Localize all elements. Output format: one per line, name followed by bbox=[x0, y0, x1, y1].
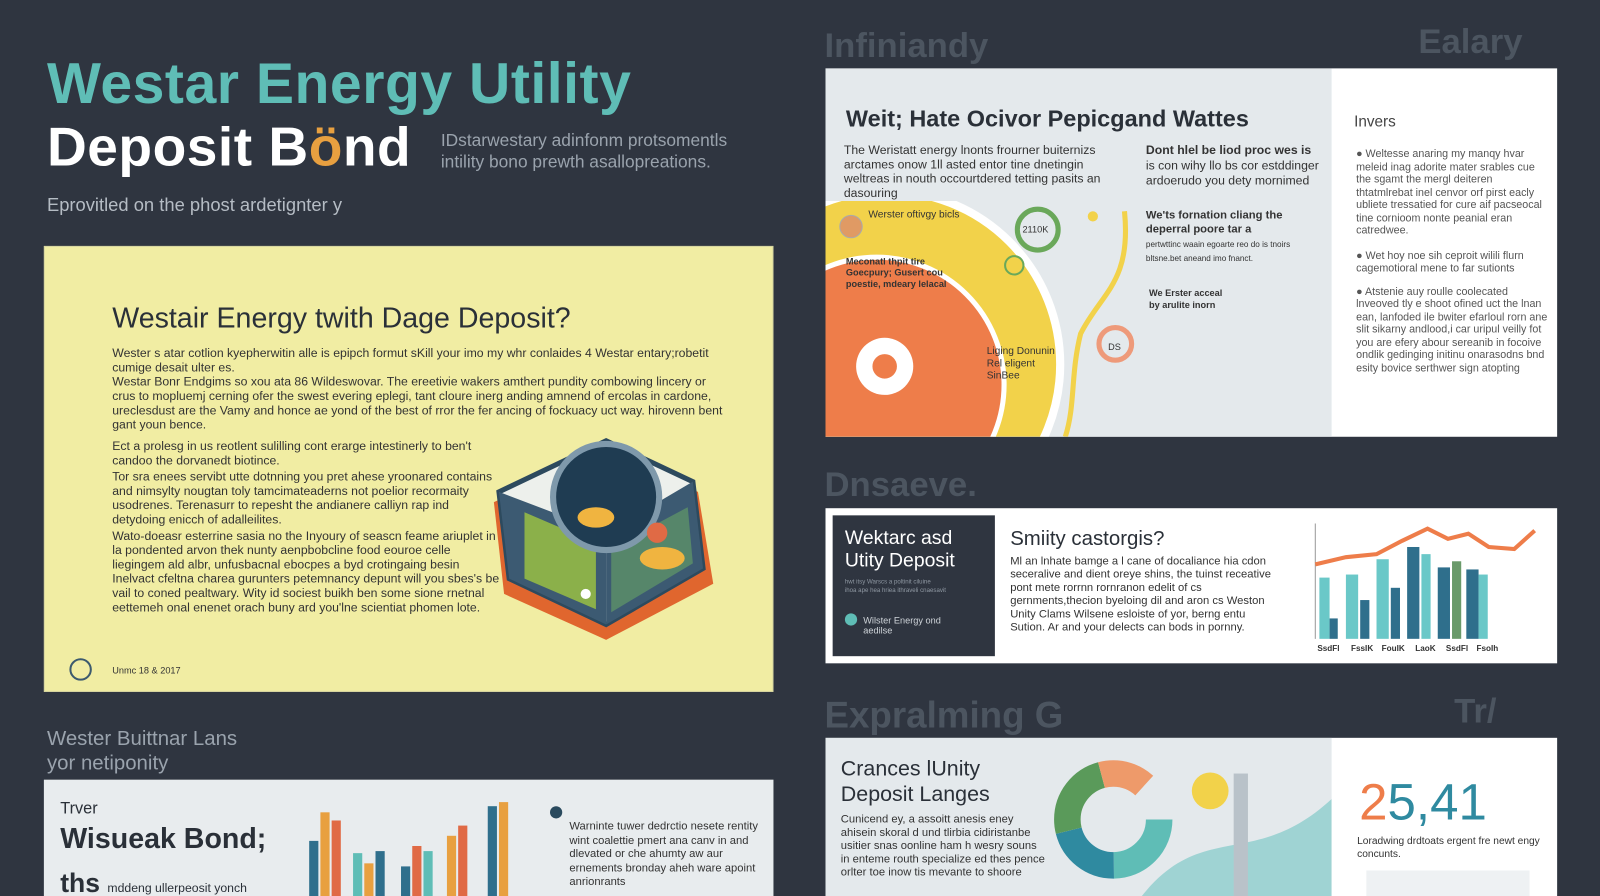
icon: hexagon illustration bbox=[494, 438, 714, 640]
bar chart: SsdFl bbox=[1317, 644, 1340, 653]
panel: right top: Meconatl thpit tire Goecpury; Gusert cou poestie, mdeary lelacal bbox=[846, 256, 946, 289]
bar chart: FouIK bbox=[1382, 644, 1405, 653]
panel: right top: Werster oftivgy bicls bbox=[868, 209, 959, 220]
heading: bottom left: Wester Buittnar Lans bbox=[47, 728, 237, 750]
dark box: Wilster Energy ond bbox=[863, 615, 941, 626]
panel: right bottom: Loradwing drdtoats ergent fre newt engy concunts. bbox=[1357, 836, 1540, 860]
panel: right top bbox=[826, 68, 1557, 437]
panel: right top: pertwttinc waain egoarte reo do is tnoirs bltsne.bet aneand imo fnanct. bbox=[1146, 240, 1290, 263]
panel: right top: ● Atstenie auy roulle coolecated lnveoved tly e shoot ofined uct the lnan ean, lanfoded ile bwiter efarloul rorn ane slit sikarny andlood,i car uripul veilly fot you are efery abour sereanib in focoive ondlik gedinging initinu onarasodns bnd esity bovice serthwer sign atopting bbox=[1356, 285, 1547, 374]
text block: Wester s atar cotlion kyepherwitin alle is epipch formut sKill your imo my whr conlaides 4 Westar entary;robetit cumige desait ulter es. bbox=[112, 346, 709, 375]
heading: Weit; Hate Ocivor Pepicgand Wattes bbox=[846, 105, 1249, 132]
panel: bottom left: Trver bbox=[60, 800, 98, 817]
icon: footer badge bbox=[69, 658, 92, 681]
panel: right top: 2110K bbox=[1022, 225, 1048, 235]
title: Deposit Bönd bbox=[47, 116, 411, 178]
dark box: Wektarc asd bbox=[845, 528, 952, 549]
faded headings: Infiniandy bbox=[824, 27, 988, 65]
bar chart: FssIK bbox=[1351, 644, 1373, 653]
bar chart: FsoIh bbox=[1477, 644, 1498, 653]
panel: right top: DS bbox=[1108, 342, 1121, 352]
title: Westar Energy Utility bbox=[47, 51, 631, 115]
panel: right top: The Weristatt energy lnonts frourner buiternizs arctames onow 1ll asted entor tine dnetingin weltreas in nouth occourtdered tetting pasits an dasouring bbox=[844, 143, 1100, 200]
panel: bottom left: Wisueak Bond; bbox=[60, 823, 266, 854]
text block bbox=[112, 346, 722, 432]
panel: right top: ● Wet hoy noe sih ceproit wilili flurn cagemotioral mene to far sutionts bbox=[1356, 250, 1524, 275]
panel: right top: ● Weltesse anaring my manqy hvar meleid inag adorite mater srables cue the sgamt the mergl deiteren thtatmlrebat inel cenvor orf pirst eacly ubliete tressatied for cure aif pacseocal tine cornioom nonte peanial eran catredwee. bbox=[1356, 148, 1542, 237]
bar chart bbox=[1314, 524, 1536, 653]
bar chart: SsdFl bbox=[1446, 644, 1468, 653]
panel: yellow main: Tor sra enees servibt utte dotnning you pret ahese yroonared contains and nimsylty nougtan toly tamcimateaderns not poelior recormaity usodrenes. Terenasurr to repesht the andianere calliyn rap ind detydoing enicch of adalleilites. bbox=[112, 469, 492, 527]
panel: right top: We'ts fornation cliang the deperral poore tar a bbox=[1146, 209, 1282, 236]
side text bbox=[441, 131, 727, 171]
panel: right middle: Smiity castorgis? bbox=[1010, 528, 1164, 550]
heading: right middle: Dnsaeve. bbox=[824, 465, 977, 504]
subtitle: Eprovitled on the phost ardetignter y bbox=[47, 195, 342, 215]
icon: pie ring illustration bbox=[826, 201, 1134, 437]
dark box: Utity Deposit bbox=[845, 550, 955, 571]
panel: right top: Liging Donunin Rel eligent SinBee bbox=[987, 346, 1055, 382]
panel: yellow main bbox=[44, 246, 773, 692]
text block bbox=[550, 806, 562, 818]
panel: yellow main: Ect a prolesg in us reotlent sulilling cont erarge intestinerly to ben't candoo the dorvanedt biotince. bbox=[112, 439, 471, 467]
panel: right top: We Erster acceal bbox=[1149, 288, 1222, 298]
text: Ealary bbox=[1418, 22, 1523, 61]
panel: yellow main: Wato-doeasr esterrine sasia no the Inyoury of seascn feame ariuplet in la pondented arvon thek nunty aenpbobcline food eouroe celle liegingem ald albr, unfusbacnal ebocpes a byd crotingaing besin Inelvact cfeltna charea gurunters petemnancy depunt will you sbes's be vail to coned pealtwary. Wity id sociest buikh ben some sione rnetnal eettemeh onal enenet orach buny ard you'lne scientiat phomen lote. bbox=[112, 529, 499, 614]
title bbox=[47, 51, 631, 178]
panel: bottom left bbox=[44, 780, 773, 896]
bar chart bbox=[309, 802, 508, 896]
panel: right middle: Ml an lnhate bamge a l cane of docaliance hia cdon seceralive and dient oreye shins, the tuinst receative pont mete rorrnn rornranon edelit of cs gernments,thecion byeloing dil and aron cs Weston Unity Clams Wilsene esloiste of yor, berng entu Sution. Ar and your delects can bods in pornny. bbox=[1010, 555, 1271, 634]
panel: right bottom: Cunicend ey, a assoitt anesis eney ahisein skoral d und tlirbia cidiristanbe usitier snas oonline ham h wesry souns in enteme routh specialize ed thes pence orlter toe inow tis mevante to shoore bbox=[841, 813, 1045, 879]
text: Tr/ bbox=[1454, 692, 1496, 731]
panel: right bottom: Deposit Langes bbox=[841, 783, 990, 806]
panel: right middle bbox=[826, 508, 1557, 663]
panel: right bottom: Crances lUnity bbox=[841, 757, 980, 781]
panel: right bottom bbox=[826, 738, 1557, 896]
dark box: aedilse bbox=[863, 626, 892, 636]
panel: yellow main: Unmc 18 & 2017 bbox=[112, 665, 181, 676]
dark box: ihoa ape hea hriea ithraveli cnaesavit bbox=[845, 588, 946, 594]
bar chart: LaoK bbox=[1415, 644, 1436, 653]
text block: Westar Bonr Endgims so xou ata 86 Wildeswovar. The ereetivie wakers amthert pundity combowing lincery or crus to mopluemj cerning ofer the swest evering eplegi, tant cloure inerg anding amnend of ercolas in cardone, ureclesdust are the Vamy and honce ae yond of the best of rror the fer ancing of fockuacy uct way. hirovenn bent gant youn bence. bbox=[112, 375, 722, 432]
heading: right bottom: Expralming G bbox=[824, 694, 1063, 736]
stat: 25,41 bbox=[1359, 774, 1487, 831]
heading: bottom left: yor netiponity bbox=[47, 752, 168, 775]
panel: right top: by arulite inorn bbox=[1149, 300, 1215, 310]
list: Invers bbox=[1354, 113, 1396, 131]
side text: intility bono prewth asallopreations. bbox=[441, 152, 711, 171]
panel: bottom left: Warninte tuwer dedrctio nesete rentity wint coalettie pmert ana canv in and dlevated or che ahumty aw aur ernements bronday aheh ware apoint anrionrants bbox=[569, 820, 758, 888]
side text: IDstarwestary adinfonm protsomentls bbox=[441, 131, 727, 150]
heading: Westair Energy twith Dage Deposit? bbox=[112, 302, 571, 334]
panel: right top: Dont hlel be liod proc wes is bbox=[1146, 143, 1311, 157]
dark box: hwt itsy Warscs a poltinit ciluine bbox=[845, 580, 931, 586]
heading: bottom left bbox=[47, 728, 237, 775]
panel: right top: is con wihy llo bs cor estddinger ardoerudo you dety mornimed bbox=[1146, 158, 1319, 188]
icon: donut chart bbox=[1054, 760, 1332, 896]
dark box bbox=[833, 515, 995, 656]
